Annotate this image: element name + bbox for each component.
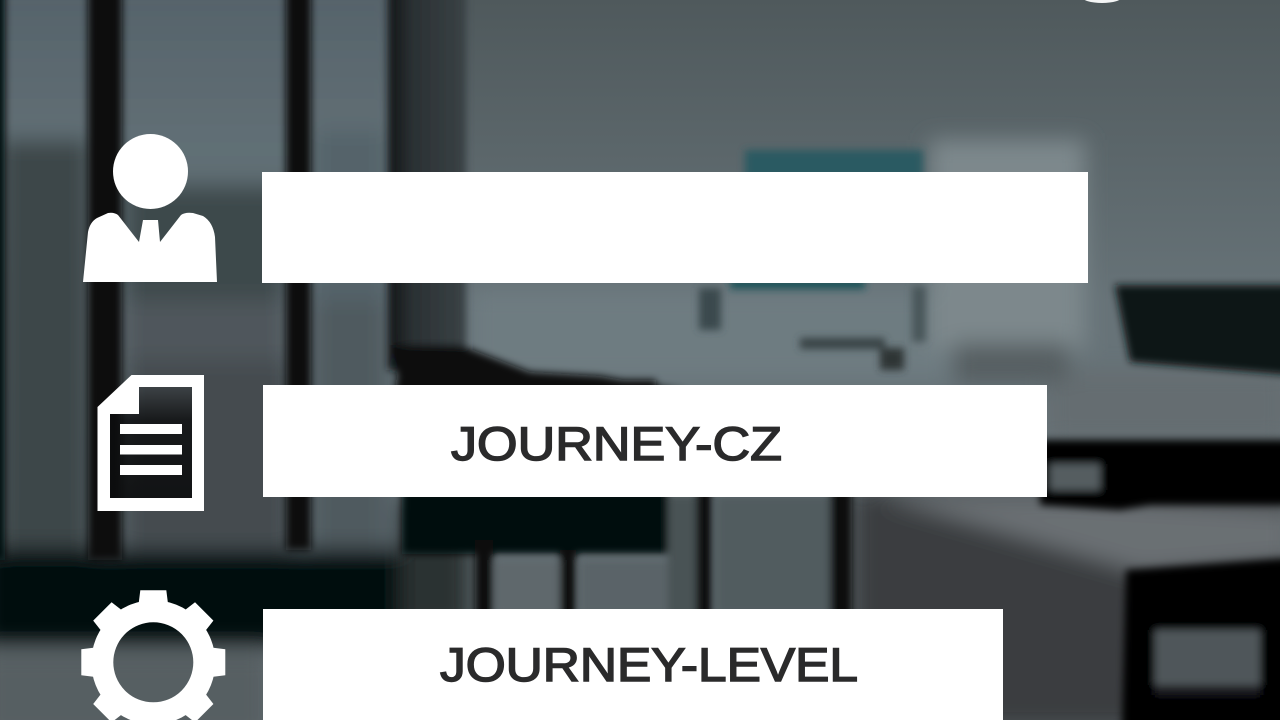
icon: person with tie <box>83 134 217 282</box>
label: JOURNEY-CZ: JOURNEY-CZ <box>451 417 782 470</box>
bar 3: JOURNEY-LEVEL panel <box>263 609 1003 720</box>
bar 2: JOURNEY-CZ panel <box>263 385 1047 497</box>
top-edge white shape fragment <box>1082 0 1122 3</box>
label: JOURNEY-LEVEL: JOURNEY-LEVEL <box>440 638 858 691</box>
icon: document <box>98 375 204 511</box>
bar 1: blank white panel <box>262 172 1088 283</box>
icon: gear <box>81 590 225 720</box>
